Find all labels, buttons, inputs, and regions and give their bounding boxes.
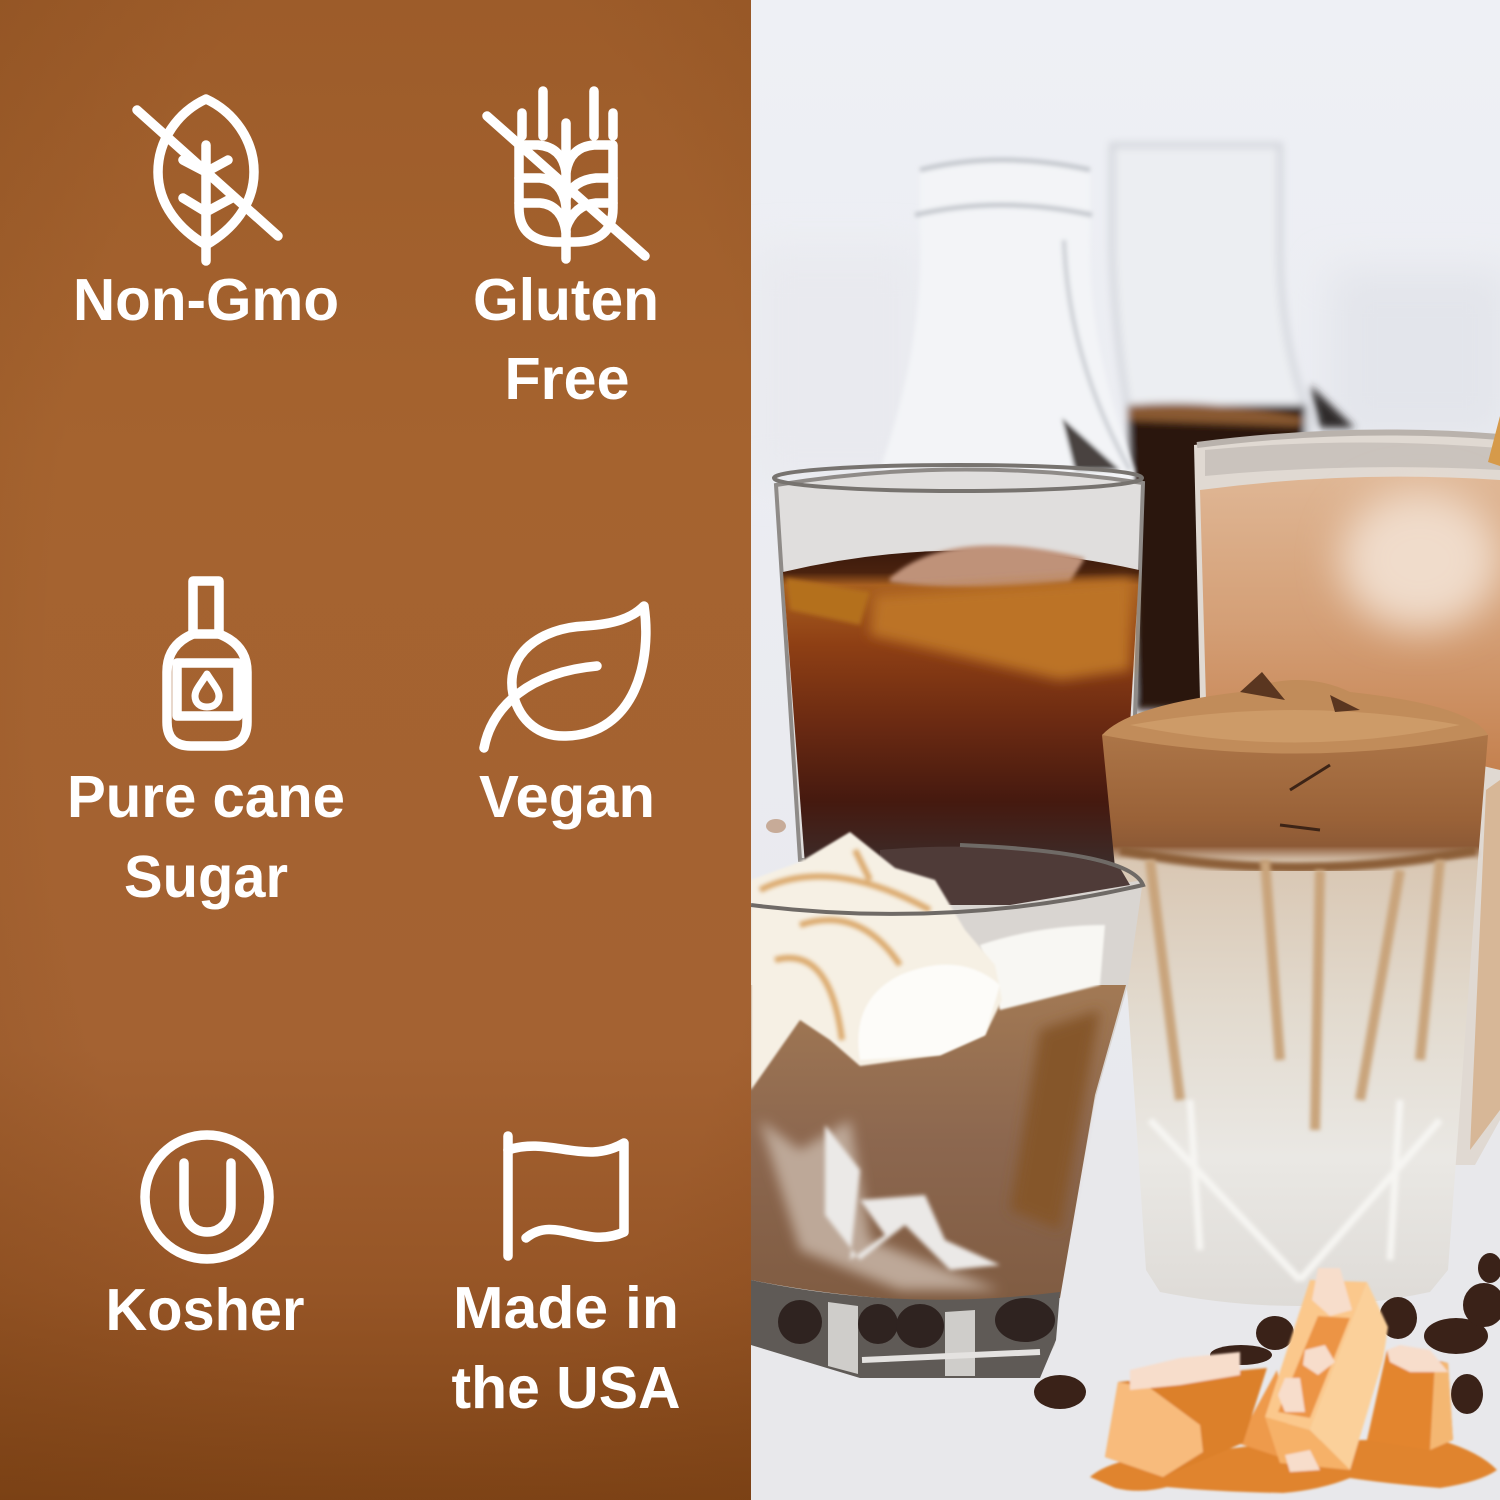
label: Pure cane Sugar — [67, 764, 345, 910]
affogato glass — [751, 832, 1143, 1378]
icon: kosher — [145, 1135, 269, 1259]
label: Gluten Free — [473, 267, 659, 412]
label: Made in the USA: Made in — [453, 1275, 679, 1341]
label: Made in the USA: the USA — [452, 1355, 680, 1421]
caramel candies — [1090, 1268, 1497, 1493]
label: Gluten Free: Free — [504, 346, 630, 412]
label: Gluten Free: Gluten — [473, 267, 659, 333]
label: Pure cane Sugar: Sugar — [124, 844, 288, 910]
iced latte glass — [1194, 416, 1500, 1165]
icon: flag — [508, 1136, 624, 1256]
panel: brown background — [0, 0, 751, 1500]
icon: vegan leaf — [484, 606, 646, 748]
dalgona glass — [1102, 672, 1488, 1306]
label: Non-Gmo: Non-Gmo — [73, 267, 339, 333]
icon: cane sugar bottle — [167, 581, 247, 746]
label: Made in the USA — [452, 1275, 680, 1421]
icon: non-GMO leaf — [137, 99, 278, 261]
photo: drinks — [751, 0, 1500, 1500]
coffee beans — [766, 819, 1500, 1414]
label: Kosher: Kosher — [106, 1277, 305, 1343]
label: Pure cane Sugar: Pure cane — [67, 764, 345, 830]
label: Vegan: Vegan — [479, 764, 655, 830]
icon: gluten free wheat — [487, 91, 645, 259]
back bottles — [880, 145, 1355, 710]
iced americano glass — [774, 465, 1143, 865]
